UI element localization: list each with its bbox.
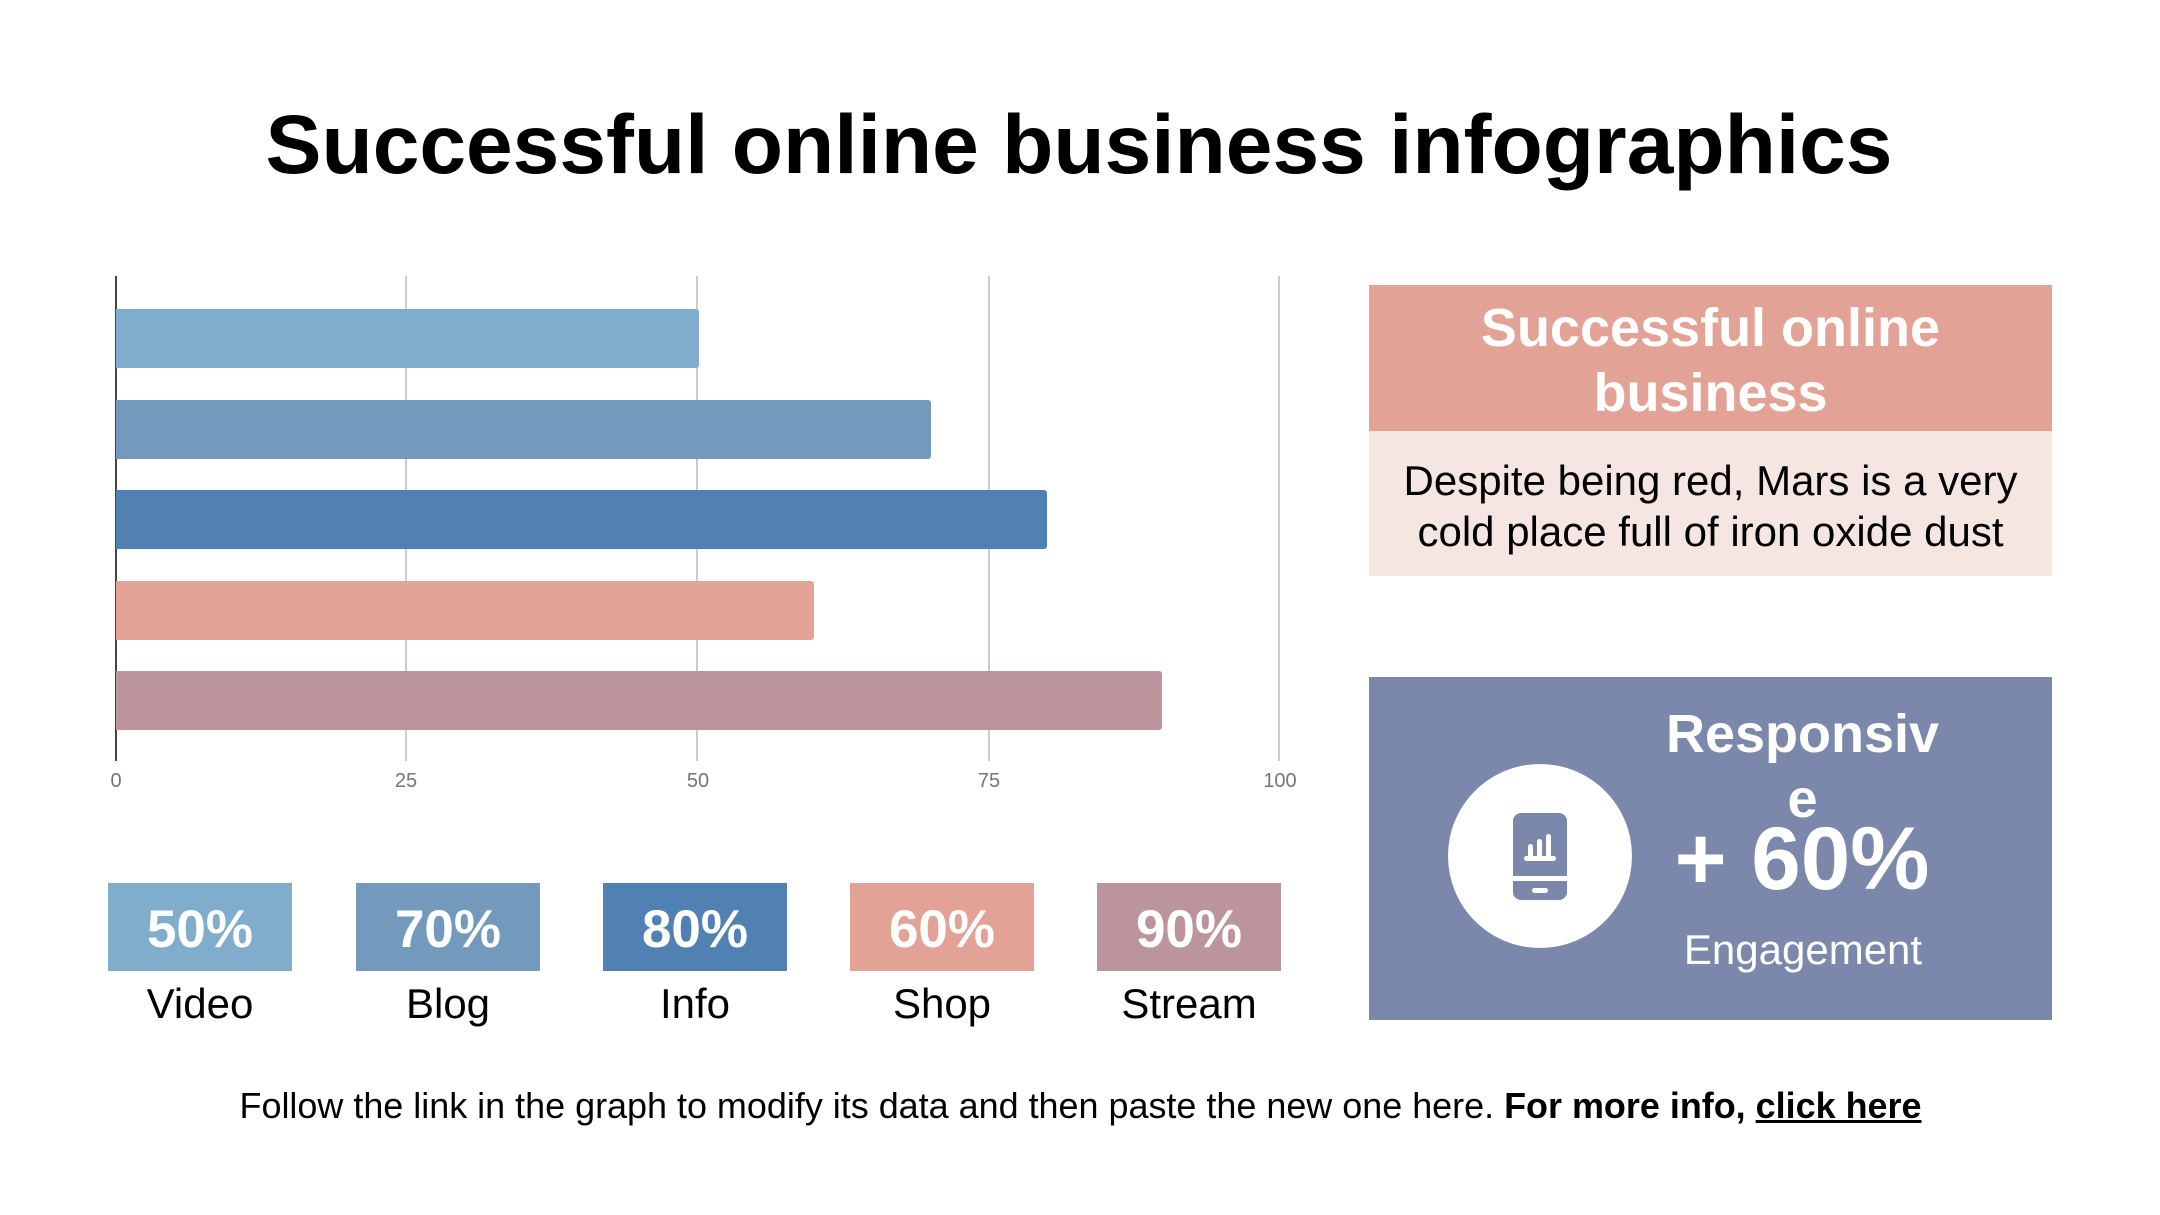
stat: Info: Info bbox=[660, 980, 730, 1027]
stat: Blog bbox=[356, 883, 540, 1027]
heading text bbox=[1481, 298, 1940, 423]
engagement label: Engagement bbox=[1684, 926, 1922, 973]
heading text: Successful online bbox=[1481, 298, 1940, 358]
gridlines and axis bbox=[115, 276, 1280, 761]
title: Successful online business infographics bbox=[266, 97, 1892, 191]
icon: phone with chart in circle bbox=[1448, 764, 1632, 948]
stat: Info bbox=[603, 883, 787, 1027]
big stat: + 60% bbox=[1675, 808, 1929, 908]
bar: Shop 60 bbox=[116, 581, 814, 640]
stat: Stream bbox=[1097, 883, 1281, 1027]
axis tick labels: 50 bbox=[687, 770, 709, 792]
panel body text bbox=[1404, 457, 2018, 555]
bar chart bbox=[110, 276, 1297, 792]
stat: Video bbox=[108, 883, 292, 1027]
stat: Shop: 60% bbox=[889, 900, 995, 959]
panel body text: Despite being red, Mars is a very bbox=[1404, 457, 2017, 504]
stat: Info: 80% bbox=[642, 900, 748, 959]
stat: Blog: 70% bbox=[395, 900, 501, 959]
heading text: business bbox=[1593, 363, 1828, 423]
bar: Video 50 bbox=[116, 309, 699, 368]
panel heading bbox=[1369, 285, 2052, 431]
panel body text: cold place full of iron oxide dust bbox=[1417, 508, 2004, 555]
panel: successful online business bbox=[1369, 285, 2052, 576]
bar: Stream 90 bbox=[116, 671, 1162, 730]
axis tick labels: 25 bbox=[395, 770, 417, 792]
axis tick labels: 100 bbox=[1263, 770, 1297, 792]
bar: Info 80 bbox=[116, 490, 1047, 549]
axis tick labels: 0 bbox=[110, 770, 122, 792]
panel: responsive engagement bbox=[1369, 677, 2052, 1020]
bar: Blog 70 bbox=[116, 400, 931, 459]
axis tick labels: 75 bbox=[978, 770, 1000, 792]
stat: Blog: Blog bbox=[406, 980, 490, 1027]
stat: Stream: Stream bbox=[1121, 980, 1257, 1027]
axis tick labels bbox=[110, 770, 1297, 792]
stat: Shop: Shop bbox=[893, 980, 991, 1027]
stat: Video: 50% bbox=[147, 900, 253, 959]
footer note: Follow the link in the graph to modify its data and then paste the new one here. For more info, click here bbox=[240, 1085, 1921, 1126]
stat: Video: Video bbox=[147, 980, 253, 1027]
stat: Stream: 90% bbox=[1136, 900, 1242, 959]
stat: Shop bbox=[850, 883, 1034, 1027]
responsive heading: Responsive bbox=[1666, 704, 1939, 829]
